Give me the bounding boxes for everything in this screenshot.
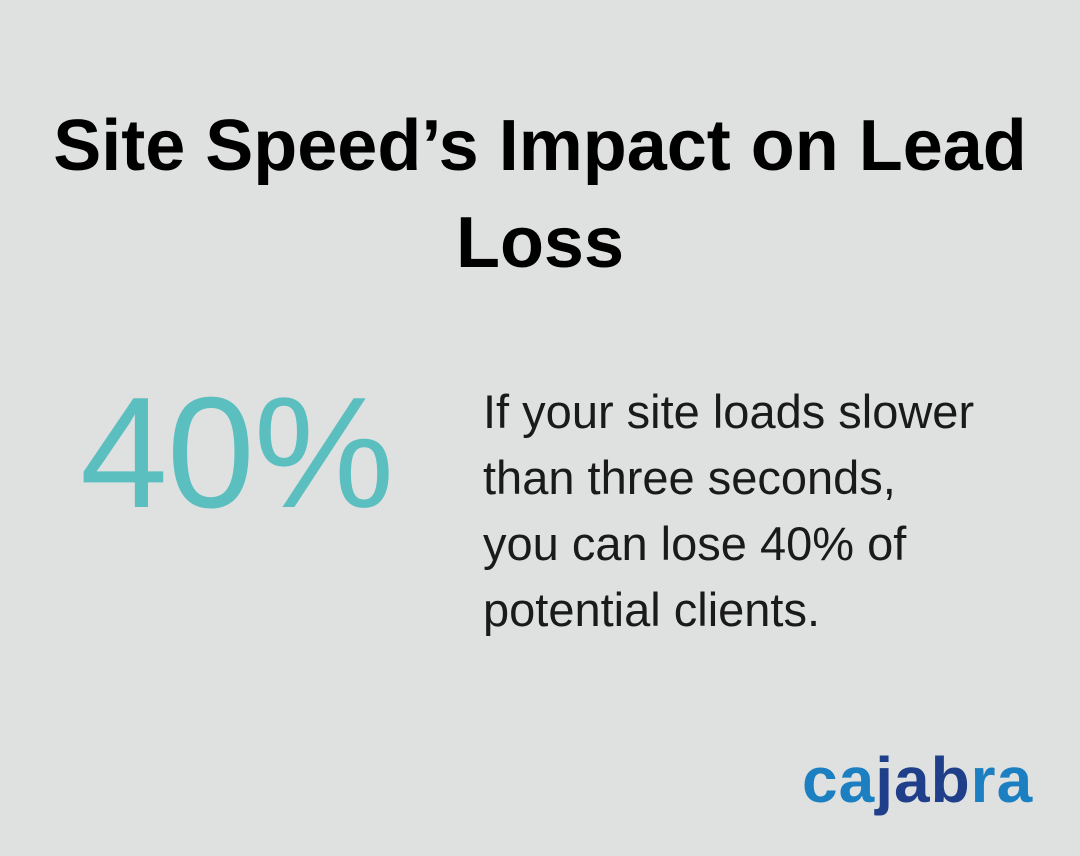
title	[53, 106, 1027, 283]
description text: you can lose 40% of	[483, 517, 906, 570]
description text: than three seconds,	[483, 451, 896, 504]
description text: potential clients.	[483, 583, 820, 636]
logo: cajabra	[802, 744, 1033, 816]
description text	[483, 385, 974, 636]
big stat: 40%	[80, 365, 393, 541]
title: Site Speed’s Impact on Lead	[53, 106, 1027, 186]
description text: If your site loads slower	[483, 385, 974, 438]
title: Loss	[456, 203, 624, 283]
